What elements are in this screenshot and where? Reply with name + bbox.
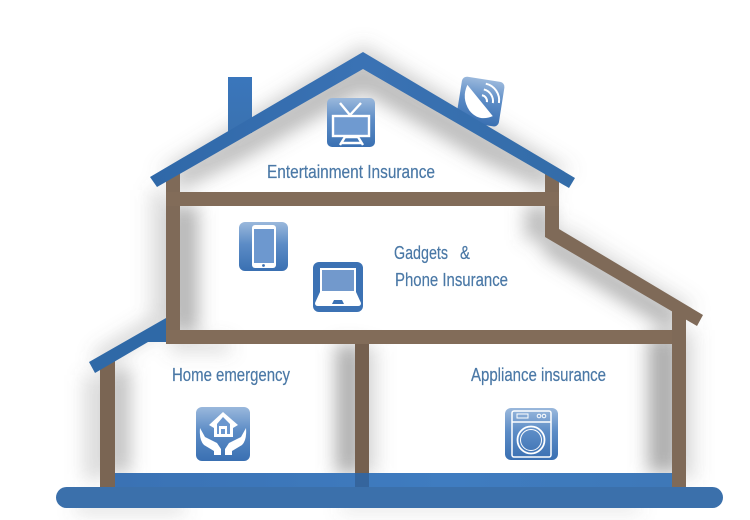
heading: gadgets and phone insurance [394, 243, 508, 290]
heading: gadgets and phone insurance: & [460, 243, 470, 263]
post base overlap [355, 473, 369, 487]
icon: television [327, 98, 375, 147]
beam: attic floor [166, 192, 559, 206]
roof: lower left [89, 318, 166, 373]
house frame [56, 52, 723, 508]
wall: lower left [100, 360, 115, 488]
icon: satellite dish [456, 76, 505, 127]
heading: appliance insurance: Appliance insurance [471, 365, 606, 385]
wall: right [672, 310, 686, 488]
icon: phone [239, 222, 288, 271]
icon: home in hands [196, 407, 250, 461]
floor strip [115, 473, 672, 487]
heading: gadgets and phone insurance: Gadgets [394, 243, 448, 263]
post: centre [355, 344, 369, 476]
wall: upper left [166, 170, 180, 344]
soft shadows around the frame [75, 44, 696, 512]
icon: washing machine [505, 408, 558, 460]
roof: main [150, 52, 575, 188]
heading: home emergency: Home emergency [172, 365, 290, 385]
beam: middle floor [166, 330, 676, 344]
wall: upper right with sloped extension [545, 170, 703, 326]
ground base [56, 487, 723, 508]
icon: laptop [313, 262, 363, 312]
heading: entertainment insurance: Entertainment Insurance [267, 162, 435, 182]
chimney [228, 77, 252, 133]
heading: gadgets and phone insurance: Phone Insurance [395, 270, 508, 290]
